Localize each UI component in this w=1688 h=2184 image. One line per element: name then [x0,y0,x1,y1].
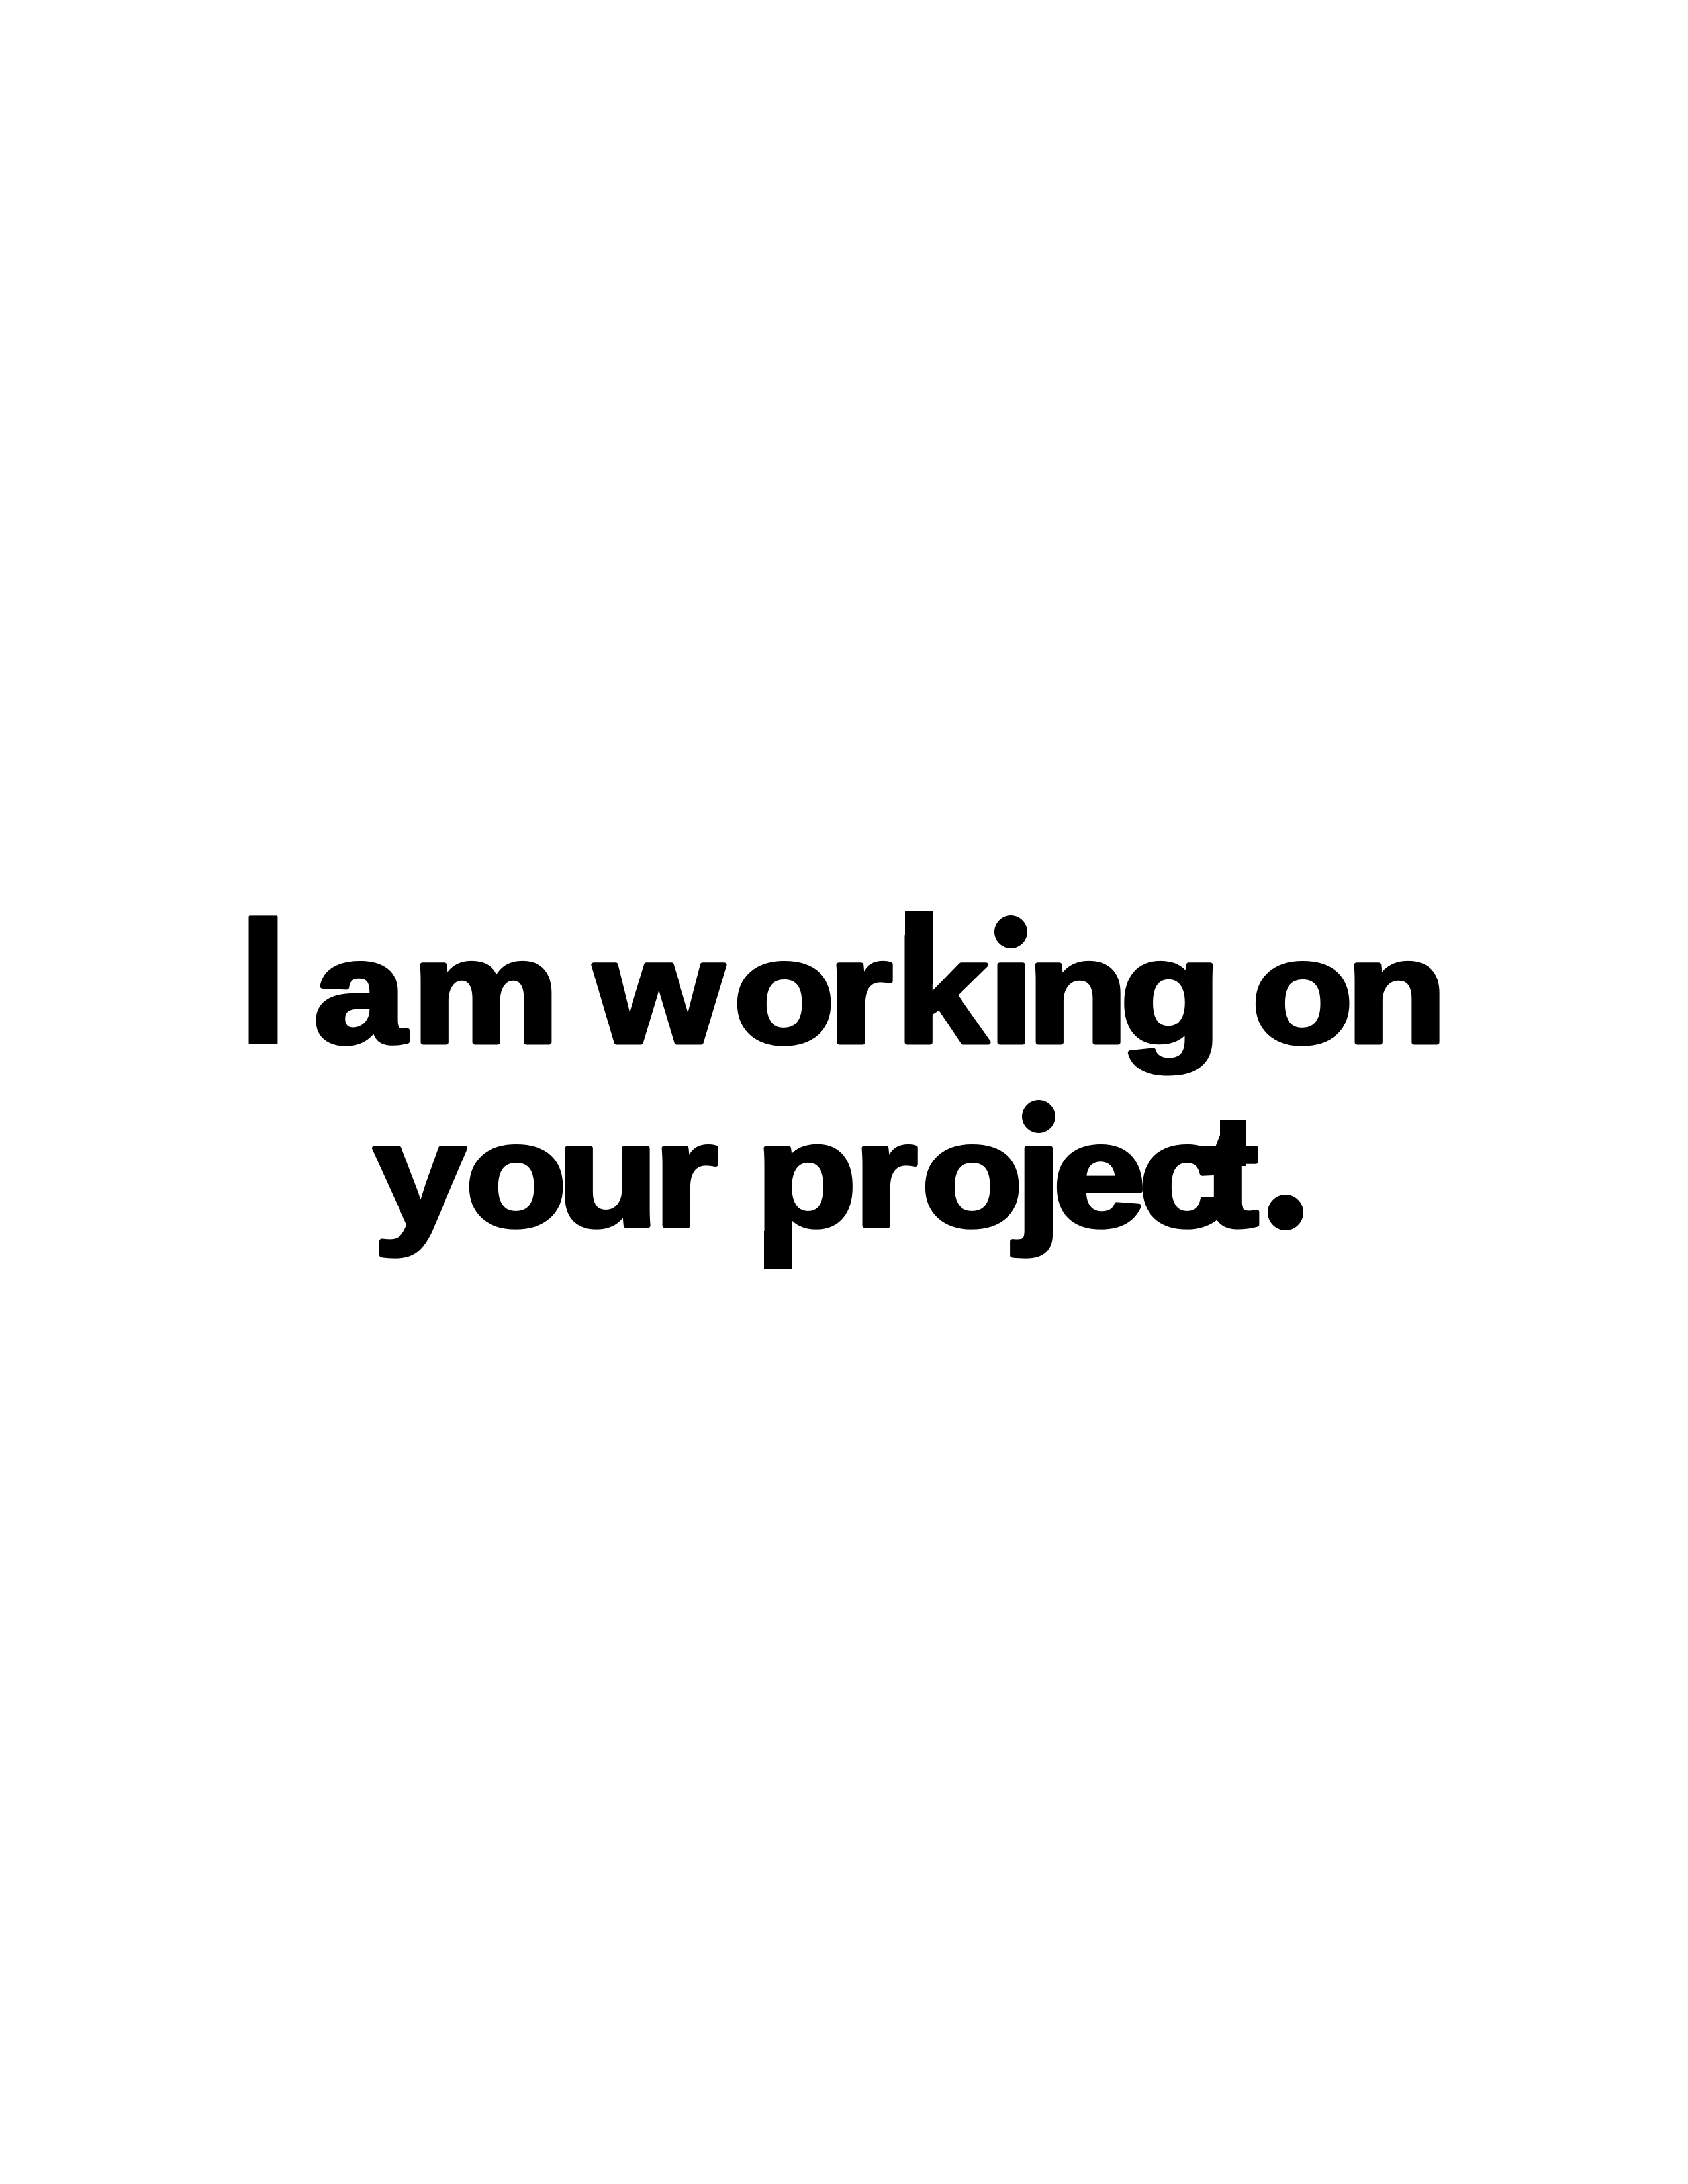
title line 1: I [238,877,289,1082]
title line 2: your [373,1093,718,1257]
title line 1: am [314,910,559,1074]
title line 1 [238,877,1447,1082]
title line 1: working [594,910,1221,1074]
title line 2: project. [755,1093,1309,1257]
title line 2 [373,1093,1309,1269]
title: I am working on your project. [238,877,1447,1269]
title line 1: on [1252,910,1447,1074]
